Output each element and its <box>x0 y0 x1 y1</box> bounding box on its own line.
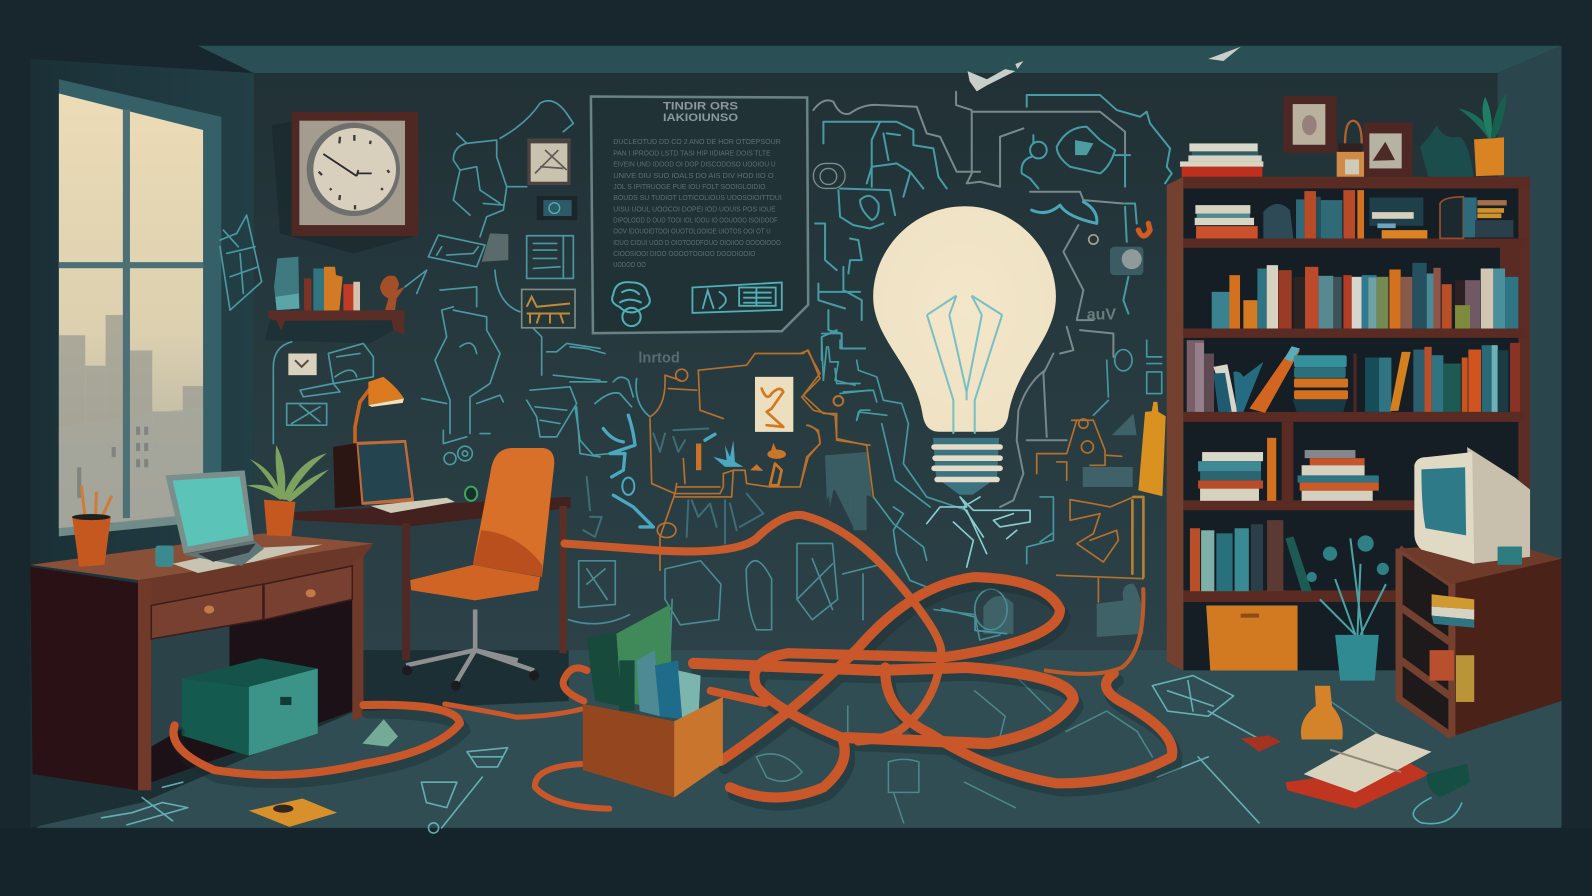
left side panel <box>1167 177 1183 670</box>
hose: floor link to box <box>445 704 582 717</box>
chalk blob <box>1075 140 1093 155</box>
far desk left leg <box>402 523 410 660</box>
left wall <box>30 59 254 828</box>
hose: lower left hook <box>535 764 609 809</box>
document body text: PAN I IPROOD LSTD TASI HIP IIDIARE DOIS TLTE <box>613 149 771 157</box>
hose: join back to box <box>711 691 766 703</box>
small note scribble <box>295 360 308 367</box>
document body text: UODOO OO <box>613 261 646 269</box>
CRT screen <box>1421 467 1466 535</box>
CRT rear <box>1467 447 1530 564</box>
open book spine shade <box>1330 750 1401 772</box>
open book <box>1304 733 1432 792</box>
dark green folder <box>587 632 621 706</box>
shelf ornament <box>380 276 405 310</box>
floor shard <box>362 719 398 747</box>
muted chalk word: lnrtod <box>638 351 680 367</box>
green storage box <box>182 658 318 756</box>
hose: far loop <box>721 577 1060 797</box>
lamp arm <box>355 388 370 490</box>
laptop lid <box>165 470 254 554</box>
cyan strokes <box>603 415 715 527</box>
box right face <box>674 697 723 797</box>
cyan swoosh <box>1032 202 1097 223</box>
camera eye <box>1089 235 1098 244</box>
hose: small loop behind box <box>563 668 587 701</box>
wall chalk circuit, lower right <box>800 340 1166 637</box>
lower haze of skyline <box>59 406 203 528</box>
monitor screen <box>358 443 411 502</box>
lamp glow <box>368 399 404 407</box>
muted patch <box>825 452 867 530</box>
wall document panel <box>591 97 808 333</box>
document title: TINDIR ORS <box>663 101 738 113</box>
book stack right <box>1298 450 1379 501</box>
monitor casing <box>333 443 363 508</box>
leafy shadow plant <box>1420 125 1473 177</box>
desk papers <box>173 545 323 573</box>
wall shelf shadow <box>265 320 403 343</box>
shelf books <box>304 267 360 311</box>
under desk wall sliver <box>151 624 229 747</box>
wall chalk circuit, upper right <box>813 92 1172 360</box>
orange lines <box>800 350 1143 602</box>
window frame <box>59 79 221 536</box>
window glass <box>59 93 203 528</box>
floor objects <box>1241 686 1470 824</box>
document body text: DUCLEOTUD DD CO 2 ANO DE HOR OTOEPSOUR <box>613 138 781 146</box>
plant leaves <box>247 445 329 502</box>
pale wires under bulb <box>927 497 1030 567</box>
sticky paper <box>755 377 793 432</box>
teal lines <box>822 340 1162 634</box>
framed photos on shelf top <box>1283 96 1413 177</box>
cyan small loop <box>622 478 634 495</box>
teal pot <box>1335 635 1379 681</box>
desk side panel <box>30 567 138 790</box>
ceiling band <box>198 46 1562 73</box>
upright orange book <box>1267 438 1276 501</box>
box handle <box>280 697 291 705</box>
bulb coils <box>934 447 1000 479</box>
orange wall circuit with note <box>570 333 870 570</box>
left desk leg <box>138 581 151 790</box>
chair back shade <box>473 530 542 577</box>
pencil cup <box>72 486 112 567</box>
desk front apron <box>138 543 374 630</box>
shelf row 4 contents <box>1198 438 1379 501</box>
cup rim <box>72 514 111 520</box>
document body text: DIPOLOOD D OUD TOOI IOL IOOU IO OOUOOO ISOIDOOF <box>613 216 778 224</box>
orange post <box>696 444 701 470</box>
hose: left floor strand <box>173 705 460 775</box>
window mullions <box>59 110 203 518</box>
orange hook <box>1138 223 1150 236</box>
plant pot <box>264 500 295 536</box>
document body text: UISU UOUL UOOCOI DOPEI IOD UOUIS POS IOUE <box>613 205 776 213</box>
clock backing <box>299 121 405 225</box>
orange thick post <box>1132 497 1143 577</box>
wall camera patch <box>1110 247 1143 275</box>
plant stems <box>1320 538 1386 635</box>
bulb base <box>933 438 999 495</box>
orange card <box>522 289 575 328</box>
CRT front <box>1414 452 1474 564</box>
grey pipes <box>813 92 1125 357</box>
laptop <box>165 470 264 566</box>
dark binder <box>619 660 635 711</box>
orange creature <box>750 443 786 471</box>
dark tablet note <box>537 196 577 220</box>
lamp shade <box>368 377 404 405</box>
brain icon <box>612 282 650 326</box>
monitor frame <box>356 440 414 505</box>
document subtitle: IAKIOIUNSO <box>663 112 738 124</box>
concentric coil <box>813 163 845 188</box>
CRT computer <box>1414 447 1530 565</box>
bulb glass <box>873 206 1056 432</box>
clock rim <box>307 123 400 216</box>
cabinet books <box>1430 594 1474 702</box>
floor shadow under far desk <box>30 650 569 828</box>
cabinet top <box>1399 541 1562 584</box>
document body text <box>613 138 782 269</box>
bulb filament <box>927 296 1002 434</box>
cup body <box>72 516 111 567</box>
drawers <box>151 566 352 639</box>
tablet icon <box>543 200 572 216</box>
laptop screen <box>173 476 249 547</box>
teal line work <box>570 333 870 455</box>
vertical dividers <box>1282 247 1520 502</box>
clock face <box>313 128 396 211</box>
box left face <box>583 704 674 797</box>
far desk top <box>294 497 571 526</box>
box left face <box>182 679 249 756</box>
wall clock and shelf region <box>220 101 600 490</box>
grey note shape <box>482 233 508 262</box>
tangled orange hose <box>173 515 1172 809</box>
right side panel <box>1518 180 1530 670</box>
hose: right big loop <box>885 667 1172 783</box>
floor <box>36 650 1562 828</box>
small green device <box>465 487 477 501</box>
hose: lower strap behind box <box>693 663 1073 744</box>
green folder <box>614 604 672 711</box>
top stack of books <box>1180 143 1263 177</box>
picture sketch <box>535 150 567 173</box>
grey lines <box>1000 354 1067 507</box>
chalk cord <box>1413 797 1462 824</box>
chair seat <box>410 565 540 600</box>
desk plant <box>247 445 329 536</box>
keyboard <box>198 543 256 562</box>
potted plant on shelf <box>1458 93 1507 176</box>
diagram box <box>692 282 782 313</box>
grey wall word: auV <box>1087 307 1116 324</box>
chalk around clock <box>220 101 600 465</box>
picture paper <box>531 143 567 182</box>
cabinet frame <box>1399 549 1452 737</box>
tablet swirl <box>549 203 560 213</box>
right wall <box>1498 46 1562 650</box>
teal muted shapes <box>983 414 1143 637</box>
jar water <box>275 293 299 310</box>
muted floor chalk <box>756 676 1396 823</box>
bottom dark band <box>0 828 1592 896</box>
clock shadow <box>272 122 417 253</box>
cardboard box with folders <box>583 604 723 797</box>
teal pipes <box>815 95 1172 360</box>
blue folders <box>637 650 701 719</box>
shelf interior <box>1183 183 1523 670</box>
desk top <box>30 533 374 580</box>
skyline building windows <box>77 427 148 498</box>
framed picture <box>527 138 571 185</box>
chair casters <box>402 665 539 691</box>
laptop base <box>184 540 264 566</box>
yellow envelope <box>249 798 337 827</box>
muted teal glyphs <box>583 429 763 544</box>
row 3 books <box>1187 340 1520 413</box>
back wall <box>254 73 1498 657</box>
papers on far desk <box>371 498 455 513</box>
green cup <box>1427 764 1470 797</box>
shelf row 5 contents <box>1190 520 1312 670</box>
wall sketches, lower centre <box>569 543 1007 650</box>
orange storage box <box>1206 605 1298 670</box>
floor paper <box>249 798 337 827</box>
lightbulb <box>873 206 1056 495</box>
document border <box>591 97 808 333</box>
right cabinet <box>1399 541 1562 737</box>
muted patch <box>825 452 872 527</box>
clock frame <box>292 112 418 236</box>
book stack left <box>1198 452 1263 501</box>
city skyline <box>59 315 203 528</box>
chair back <box>473 448 554 574</box>
yellow hanging tag <box>1138 402 1166 496</box>
document body text: BOUDS SU TUDIOT LOTICOLIOUS UDOSOIOITTDUI <box>613 194 782 202</box>
right desk leg <box>352 555 363 721</box>
floor chalk sketches <box>102 676 1264 833</box>
clock ticks <box>319 135 389 209</box>
camera lens <box>1122 249 1142 269</box>
potted chalk plant <box>1307 535 1389 681</box>
document body text: UNIVE DIU SUO IOALS DO AIS DIV HOD IIO O <box>613 172 774 180</box>
mug <box>155 546 174 567</box>
far desk <box>294 440 571 660</box>
row 2 books <box>1212 263 1518 329</box>
plant foliage <box>1307 535 1389 582</box>
shelf board <box>268 310 404 335</box>
small paper note <box>288 353 317 375</box>
clock hands <box>323 154 372 176</box>
upright books <box>1190 520 1312 591</box>
document body text: JOL S IPITRUOGE PUE IOU FOLT SOOIGLOIDIO <box>613 183 766 191</box>
creature body <box>770 464 782 485</box>
bookshelf <box>1167 93 1530 670</box>
sticky scribble <box>762 389 783 427</box>
red book <box>1285 764 1430 809</box>
drawer handles <box>204 589 316 614</box>
document body text: CIOOSIOOI DIOO OOOOTOOIOO DOOOIOOIO <box>613 250 756 258</box>
window sill <box>59 513 221 536</box>
jar on shelf <box>274 257 299 310</box>
ceiling debris <box>968 47 1241 91</box>
pencils <box>81 486 112 518</box>
orange bottle <box>1301 686 1343 740</box>
cyan bird <box>713 440 743 467</box>
hose: thin strand up to tag <box>1046 589 1143 674</box>
chair base legs <box>406 610 534 683</box>
hose: wall strand <box>565 515 941 742</box>
shelf boards <box>1183 177 1530 602</box>
red brush <box>1241 735 1281 752</box>
document body text: OOV IDOUOIDTOOI OUOTOLOOIOE UIOTOS OOI OT U <box>613 228 771 236</box>
document body text: EIVEIN UND IDOOD OI DOP DISCODOSO UOOIOU U <box>613 161 776 169</box>
cabinet side <box>1452 559 1562 737</box>
cabinet front <box>1399 549 1452 737</box>
far desk right leg <box>559 506 567 653</box>
main desk <box>30 533 374 790</box>
office chair <box>402 448 554 691</box>
box right face <box>249 668 318 756</box>
envelope stain <box>273 805 293 813</box>
row 1 books <box>1195 190 1513 238</box>
box top opening <box>182 658 318 687</box>
desk underside <box>151 599 352 782</box>
storage box handle <box>1241 614 1259 618</box>
small teal can <box>1498 547 1522 565</box>
document body text: IDUO CIOUI UOO D OIOTOODFOUO OIOIIOO OOOOIOOO <box>613 239 781 247</box>
orange line work <box>650 350 870 570</box>
window <box>59 79 221 536</box>
hose shadow <box>178 584 1176 805</box>
